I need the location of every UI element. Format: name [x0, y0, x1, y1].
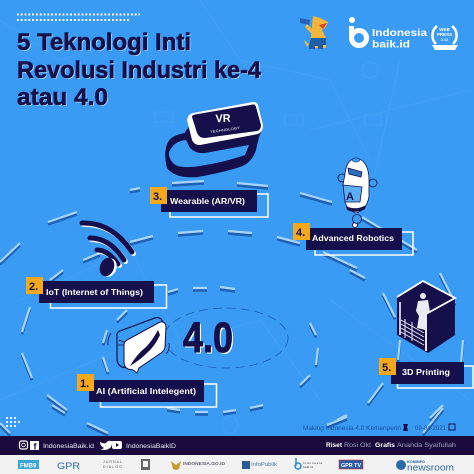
- icon: mascot: [300, 16, 328, 49]
- logo: press award: [432, 26, 458, 50]
- footer: social bar: f: [34, 442, 38, 452]
- title: Revolusi Industri ke-4: [18, 58, 263, 85]
- heading: 4.0: 4.0: [184, 316, 234, 364]
- label 3: Wearable: Wearable (AR/VR): [170, 196, 245, 206]
- footer: social bar: Grafis: [375, 443, 396, 449]
- label 1: AI: 1.: [80, 378, 89, 390]
- label 4: Advanced Robotics: [293, 223, 413, 255]
- icon: VR headset: TECHNOLOGY: [210, 126, 241, 134]
- heading: 4.0: 4.0: [183, 314, 233, 362]
- footer: partner logos: KOMINFO: [407, 460, 425, 464]
- label 1: AI: AI (Artificial Intelegent): [96, 386, 196, 396]
- title: atau 4.0: [17, 84, 108, 111]
- icon: robot: [338, 158, 377, 228]
- footer: partner logos: DIALOG: [103, 465, 122, 469]
- label 3: Wearable: [150, 187, 268, 217]
- label 4: Advanced Robotics: Advanced Robotics: [312, 233, 394, 243]
- logo: press award: WEB: [439, 27, 450, 32]
- label 5: 3D Printing: [379, 358, 473, 388]
- label 4: Advanced Robotics: 4.: [296, 227, 305, 239]
- label 2: IoT: [26, 277, 166, 308]
- icon: robot: A: [346, 191, 354, 203]
- title: Revolusi Industri ke-4: [17, 57, 262, 84]
- footer: partner logos: newsroom: [407, 462, 454, 472]
- dashed ring around 4.0: [164, 308, 288, 368]
- label 5: 3D Printing: 3D Printing: [402, 367, 450, 377]
- source credit: Making Indonesia 4.0 Kemenperin: [303, 426, 401, 432]
- label 5: 3D Printing: 5.: [382, 362, 391, 374]
- logo: Indonesia Baik: [349, 17, 427, 50]
- footer: social bar: Rosi Okt: [344, 443, 371, 449]
- footer: partner logos: [0, 455, 474, 474]
- title: 5 Teknologi Inti: [18, 30, 192, 57]
- footer: partner logos: GPR: [57, 461, 81, 471]
- source credit: [303, 424, 455, 432]
- footer: social bar: Ananda Syaifullah: [397, 443, 456, 449]
- logo: Indonesia Baik: baik.id: [372, 38, 410, 50]
- footer: partner logos: FMB9: [20, 464, 37, 470]
- footer: social bar: IndonesiaBaik.id: [43, 443, 95, 450]
- icon: VR headset: VR: [215, 113, 231, 125]
- decorative dots icon: [6, 417, 20, 427]
- footer: partner logos: Indonesia: [303, 461, 322, 465]
- label 2: IoT: IoT (Internet of Things): [46, 287, 143, 297]
- footer: partner logos: INDONESIA.GO.ID: [183, 461, 226, 467]
- icon: VR headset: [165, 102, 263, 177]
- footer: social bar: IndonesiaBaikID: [126, 443, 177, 450]
- footer: partner logos: InfoPublik: [251, 462, 277, 468]
- footer: partner logos: GPR TV: [341, 463, 361, 469]
- label 1: AI: [77, 374, 216, 407]
- footer: social bar: Riset: [326, 443, 342, 449]
- label 3: Wearable: 3.: [153, 191, 162, 203]
- source credit: 09-04-2021: [415, 426, 447, 432]
- logo: Indonesia Baik: Indonesia: [372, 27, 427, 39]
- icon: AI chat bubble: [108, 318, 169, 373]
- icon: 3D printer: [397, 281, 455, 353]
- logo: press award: PRESS: [437, 32, 452, 37]
- footer: partner logos: baik.id: [303, 465, 313, 469]
- footer: partner logos: JURNAL: [103, 460, 122, 464]
- title: 5 Teknologi Inti: [17, 29, 191, 56]
- title: [17, 29, 263, 112]
- orbit dashes: [0, 181, 463, 435]
- title dots: [17, 14, 140, 20]
- logo: press award: 2018: [441, 38, 448, 42]
- footer: social bar: [0, 436, 474, 455]
- title: atau 4.0: [18, 85, 109, 112]
- label 2: IoT: 2.: [29, 281, 38, 293]
- icon: wifi: [82, 223, 134, 279]
